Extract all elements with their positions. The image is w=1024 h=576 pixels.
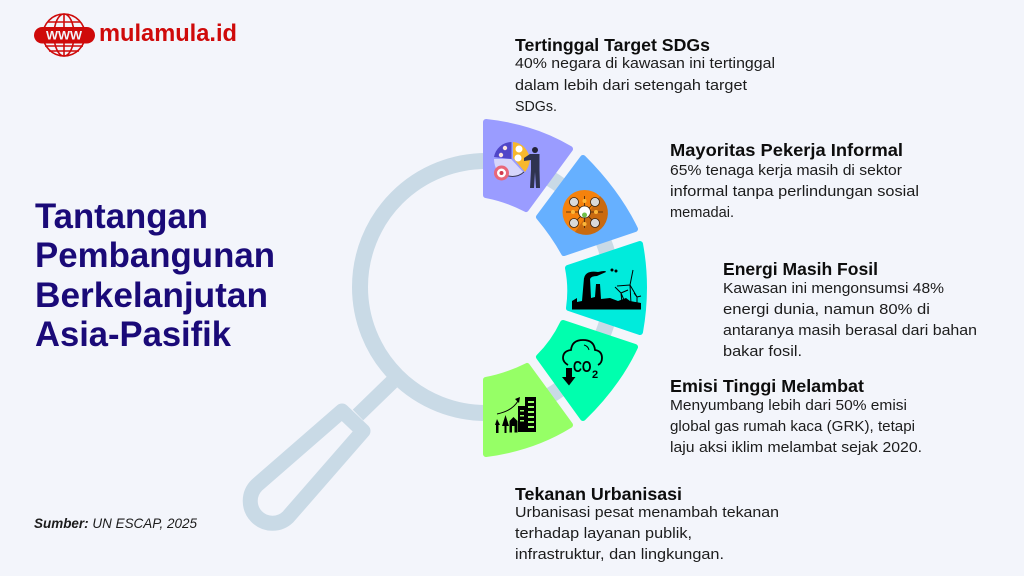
icon: worker network [562,190,608,235]
text block: Tekanan Urbanisasi: terhadap layanan publik, [515,526,692,542]
panel: SDG segment [486,122,570,209]
title: Pembangunan [35,236,275,275]
text block: Emisi Tinggi Melambat: laju aksi iklim melambat sejak 2020. [670,440,922,456]
magnifying glass [250,161,612,523]
text block: Emisi Tinggi Melambat [670,376,922,456]
text block: Tekanan Urbanisasi: Urbanisasi pesat menambah tekanan [515,505,779,521]
text block: Energi Masih Fosil: bakar fosil. [723,344,802,360]
text block: Energi Masih Fosil: antaranya masih berasal dari bahan [723,323,977,339]
text block: Energi Masih Fosil: energi dunia, namun 80% di [723,302,930,318]
title: Tantangan [35,197,208,236]
text block: Mayoritas Pekerja Informal: 65% tenaga kerja masih di sektor [670,163,902,179]
text block: Mayoritas Pekerja Informal: Mayoritas Pekerja Informal [670,140,903,160]
icon: www globe: WWW [46,30,82,42]
text block: Tertinggal Target SDGs: Tertinggal Target SDGs [515,35,710,55]
icon: CO2 cloud with down arrow: CO [573,359,592,376]
icon: pie chart and presenter [494,142,540,188]
text block: Tertinggal Target SDGs: SDGs. [515,99,557,115]
title: Asia-Pasifik [35,315,232,354]
text block: Energi Masih Fosil [723,259,977,360]
text block: Tertinggal Target SDGs: dalam lebih dari setengah target [515,78,747,94]
text block: Tertinggal Target SDGs [515,35,775,115]
text block: Emisi Tinggi Melambat: Menyumbang lebih dari 50% emisi [670,398,907,414]
text block: Tekanan Urbanisasi [515,484,779,563]
logo wordmark: mulamula.id [99,20,237,47]
text block: Tekanan Urbanisasi: infrastruktur, dan lingkungan. [515,547,724,563]
icon: CO2 cloud with down arrow: 2 [592,369,598,381]
icon: city and growth arrow [495,397,536,433]
icon: www globe [34,14,95,56]
icon: factory and wind turbines [572,268,641,310]
text block: Emisi Tinggi Melambat: global gas rumah kaca (GRK), tetapi [670,419,915,435]
panel: emission segment [539,323,635,418]
text block: Mayoritas Pekerja Informal: memadai. [670,205,734,221]
text block: Tekanan Urbanisasi: Tekanan Urbanisasi [515,484,682,504]
text block: Mayoritas Pekerja Informal [670,140,919,221]
panel: fossil energy segment [568,244,644,332]
panel: urbanisation segment [486,366,570,454]
title: Berkelanjutan [35,276,268,315]
source note: Sumber: UN ESCAP, 2025 [34,515,197,531]
title [35,197,275,354]
panel: informal workers segment [539,158,635,253]
text block: Energi Masih Fosil: Kawasan ini mengonsumsi 48% [723,281,944,297]
logo: mulamula.id [34,14,237,56]
text block: Emisi Tinggi Melambat: Emisi Tinggi Melambat [670,376,864,396]
icon: CO2 cloud with down arrow [562,340,602,386]
text block: Mayoritas Pekerja Informal: informal tanpa perlindungan sosial [670,184,919,200]
text block: Energi Masih Fosil: Energi Masih Fosil [723,259,878,279]
text block: Tertinggal Target SDGs: 40% negara di kawasan ini tertinggal [515,56,775,72]
